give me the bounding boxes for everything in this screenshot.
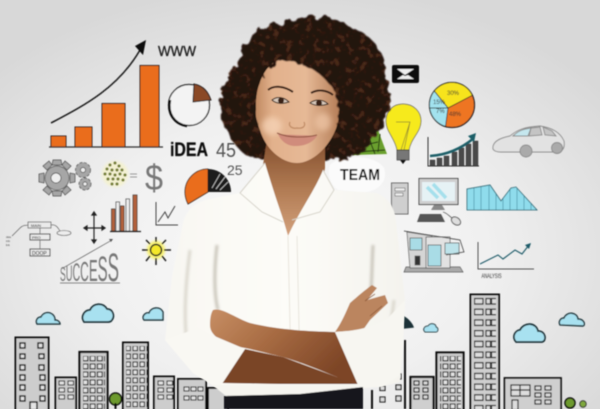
eyebrows [268,87,333,95]
team bubble [329,157,385,193]
green triangle [352,130,387,155]
rolled right cuff [335,300,405,387]
process diagram: link [6,244,11,247]
sun [142,237,171,265]
orange and black pie [185,169,231,204]
crossed arms [210,285,388,384]
cross arrows [84,212,105,243]
idea label: iDEA [170,140,208,161]
mouth [278,134,317,146]
desktop computer [417,178,462,227]
left city buildings [16,338,228,409]
process diagram: DOOP [32,251,47,257]
neck [263,140,325,236]
hair back [221,16,390,160]
hair fringe [245,44,350,130]
process diagram: data [6,236,11,239]
numbers 45 and 25: 45 [216,140,236,162]
black trousers [224,387,363,409]
rolled left cuff [165,328,245,388]
analysis line chart: ANALYSIS [482,274,502,280]
small line chart [156,202,178,225]
orange bar chart with rising arrow [49,40,163,147]
nose [289,122,305,128]
white shirt [165,163,405,390]
green tree [110,393,122,409]
percentage pie chart: 7% [436,109,445,115]
pie sketch [168,84,211,126]
right city buildings [372,294,561,409]
percentage pie chart: 48% [449,112,462,118]
person [165,16,405,409]
percentage pie chart: 30% [447,91,460,97]
process diagram: MAIN [31,223,41,228]
right green trees [565,398,586,408]
computer tower [392,183,408,214]
blue area chart [467,185,537,210]
www label: WWW [158,44,196,60]
gears [39,160,91,196]
shirt details [185,163,394,372]
light bulb [386,104,421,164]
car sketch [493,126,564,157]
percentage pie chart [429,82,474,128]
small orange and white bars [110,195,141,232]
growth chart [428,133,479,166]
dots and dollar sign [102,157,163,198]
process diagram: PRO [32,235,41,240]
team bubble: TEAM [340,167,380,184]
process diagram [6,222,71,257]
analysis line chart [478,242,534,280]
face [256,57,339,163]
clouds [36,304,584,342]
numbers 45 and 25: 25 [227,162,243,178]
success label with arrow: SUCCESS [60,246,119,290]
modern house sketch [404,231,464,272]
shirt hem [212,385,358,396]
percentage pie chart: 15% [433,100,446,106]
numbers 45 and 25 [216,140,243,178]
eyes [272,98,328,106]
envelope icon [392,65,419,83]
process diagram: info [6,240,11,243]
dots and dollar sign: $ [145,157,163,198]
